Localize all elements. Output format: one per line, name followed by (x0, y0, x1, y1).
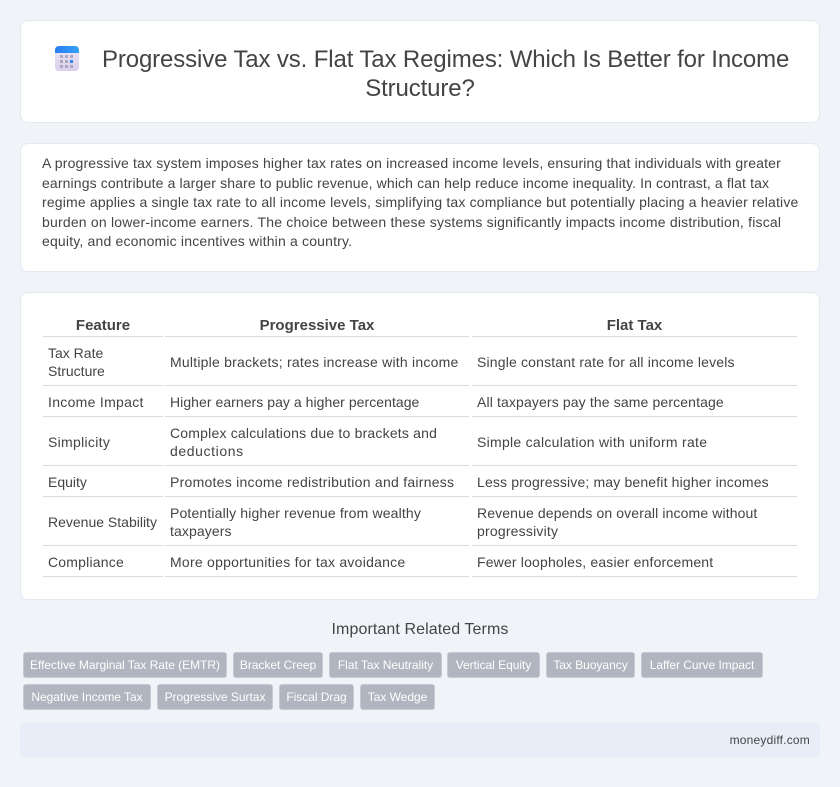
row: tax rate structure: Tax Rate (48, 345, 103, 361)
tag (233, 652, 323, 678)
related term tags (23, 652, 763, 710)
tag (23, 652, 227, 678)
row: simplicity: Simplicity (48, 434, 110, 450)
row: compliance: Fewer loopholes, easier enforcement (477, 554, 713, 570)
tag: Tax Buoyancy (553, 658, 628, 672)
tag (329, 652, 442, 678)
title (102, 46, 789, 102)
row: tax rate structure: Structure (48, 363, 105, 379)
footer source: moneydiff.com (730, 733, 810, 747)
tag: Progressive Surtax (165, 690, 265, 704)
row: simplicity (48, 425, 707, 459)
table header: Feature (76, 317, 130, 334)
intro paragraph: equity, and economic incentives within a country. (42, 233, 352, 249)
row: compliance (48, 554, 714, 570)
row: simplicity: Simple calculation with uniform rate (477, 434, 707, 450)
intro paragraph: regime applies a single tax rate to all income levels, simplifying tax compliance but potentially placing a heavier relative (42, 194, 798, 210)
row: income impact: All taxpayers pay the same percentage (477, 394, 724, 410)
tag (546, 652, 635, 678)
tag: Vertical Equity (456, 658, 531, 672)
intro paragraph: burden on lower-income earners. The choice between these systems significantly impacts income distribution, fiscal (42, 214, 781, 230)
panel: header (20, 20, 820, 123)
row: revenue stability (48, 505, 758, 539)
row: equity: Equity (48, 474, 87, 490)
footer bar (20, 723, 820, 757)
tag (157, 684, 273, 710)
tag: Flat Tax Neutrality (338, 658, 433, 672)
row: simplicity: Complex calculations due to brackets and (170, 425, 437, 441)
row: tax rate structure: Multiple brackets; rates increase with income (170, 354, 458, 370)
row: equity: Less progressive; may benefit higher incomes (477, 474, 769, 490)
panel: introduction text (20, 143, 820, 272)
intro paragraph: A progressive tax system imposes higher tax rates on increased income levels, ensuring that individuals with greater (42, 155, 781, 171)
tag (279, 684, 354, 710)
row: revenue stability: Revenue Stability (48, 514, 157, 530)
row: tax rate structure: Single constant rate for all income levels (477, 354, 735, 370)
row: income impact: Higher earners pay a higher percentage (170, 394, 419, 410)
table header: Progressive Tax (260, 317, 374, 334)
tag (360, 684, 435, 710)
tag (641, 652, 763, 678)
row: revenue stability: Potentially higher revenue from wealthy (170, 505, 421, 521)
row: equity: Promotes income redistribution and fairness (170, 474, 454, 490)
tag (23, 684, 151, 710)
row: compliance: More opportunities for tax avoidance (170, 554, 405, 570)
row: tax rate structure (48, 345, 735, 379)
tag: Fiscal Drag (286, 690, 347, 704)
panel: comparison table (20, 292, 820, 600)
title: Structure? (365, 75, 475, 102)
icon: calendar (55, 46, 79, 71)
row: revenue stability: progressivity (477, 523, 558, 539)
intro paragraph (42, 155, 798, 249)
table header (76, 317, 662, 334)
tag: Tax Wedge (368, 690, 427, 704)
tag (447, 652, 540, 678)
row: compliance: Compliance (48, 554, 124, 570)
row: revenue stability: taxpayers (170, 523, 232, 539)
row: equity (48, 474, 769, 490)
row: revenue stability: Revenue depends on overall income without (477, 505, 757, 521)
title: Progressive Tax vs. Flat Tax Regimes: Which Is Better for Income (102, 46, 789, 73)
row: income impact: Income Impact (48, 394, 144, 410)
row: income impact (48, 394, 724, 410)
intro paragraph: earnings contribute a larger share to public revenue, which can help reduce income inequality. In contrast, a flat tax (42, 175, 769, 191)
tag: Negative Income Tax (31, 690, 143, 704)
tag: Effective Marginal Tax Rate (EMTR) (30, 658, 220, 672)
row: simplicity: deductions (170, 443, 244, 459)
tag: Bracket Creep (240, 658, 316, 672)
tag: Laffer Curve Impact (650, 658, 754, 672)
table header: Flat Tax (607, 317, 662, 334)
heading: important related terms: Important Related Terms (332, 621, 508, 638)
